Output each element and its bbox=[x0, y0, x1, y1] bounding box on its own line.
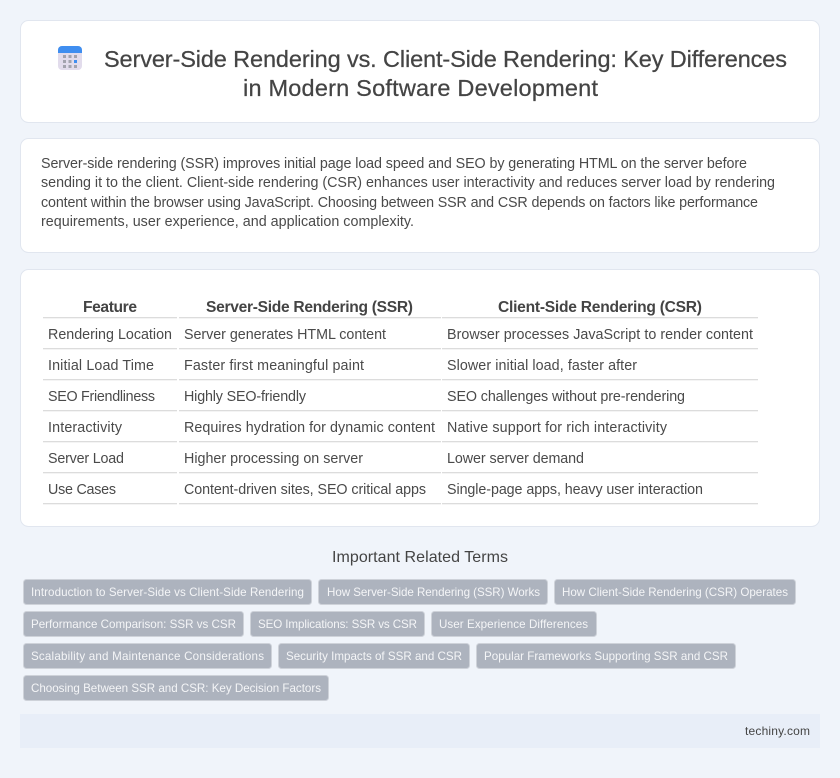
table row: server load bbox=[48, 451, 584, 467]
table row: initial load time bbox=[48, 358, 637, 374]
title bbox=[104, 46, 787, 101]
table row: rendering location: Browser processes JavaScript to render content bbox=[447, 327, 753, 343]
table row: SEO friendliness bbox=[48, 389, 685, 405]
tag: choosing bbox=[24, 676, 328, 700]
tag list: related terms bbox=[24, 580, 796, 700]
table row: server load: Server Load bbox=[48, 451, 124, 467]
tag: how SSR works bbox=[318, 580, 548, 604]
tag: introduction bbox=[24, 580, 312, 604]
footer bbox=[20, 714, 820, 748]
text block: summary: sending it to the client. Client-side rendering (CSR) enhances user interactivity and reduces server load by rendering bbox=[41, 175, 775, 191]
tag: how CSR operates bbox=[554, 580, 796, 604]
table header bbox=[83, 299, 702, 316]
title: Server-Side Rendering vs. Client-Side Rendering: Key Differences bbox=[104, 46, 787, 72]
tag: how SSR works: How Server-Side Rendering (SSR) Works bbox=[327, 586, 540, 599]
table row: interactivity: Requires hydration for dynamic content bbox=[184, 420, 435, 436]
tag: user experience bbox=[432, 612, 596, 636]
panel: summary text bbox=[20, 138, 820, 252]
footer: techiny.com bbox=[745, 724, 810, 738]
table row: SEO friendliness: SEO Friendliness bbox=[48, 389, 155, 405]
table row: interactivity: Native support for rich interactivity bbox=[447, 420, 668, 436]
text block: summary: requirements, user experience, and application complexity. bbox=[41, 214, 414, 230]
tag: performance comparison bbox=[24, 612, 244, 636]
tag: security: Security Impacts of SSR and CSR bbox=[286, 650, 462, 663]
table row: rendering location: Rendering Location bbox=[48, 327, 172, 343]
title: in Modern Software Development bbox=[243, 75, 598, 101]
table row: initial load time: Slower initial load, faster after bbox=[447, 358, 637, 374]
table row: use cases: Content-driven sites, SEO critical apps bbox=[184, 482, 426, 498]
tag: user experience: User Experience Differences bbox=[439, 618, 588, 631]
panel: comparison table bbox=[20, 270, 820, 526]
tag: scalability bbox=[24, 644, 272, 668]
table header: Server-Side Rendering (SSR) bbox=[206, 299, 413, 316]
table rules bbox=[43, 317, 758, 504]
panel: header bbox=[20, 20, 820, 122]
icon: calendar grid bbox=[58, 46, 82, 70]
tag: performance comparison: Performance Comparison: SSR vs CSR bbox=[31, 618, 236, 631]
table row: interactivity: Interactivity bbox=[48, 420, 123, 436]
text block: summary bbox=[41, 156, 775, 230]
table row: rendering location bbox=[48, 327, 753, 343]
table row: use cases: Use Cases bbox=[48, 482, 116, 498]
tag: frameworks bbox=[476, 644, 736, 668]
tag: how CSR operates: How Client-Side Rendering (CSR) Operates bbox=[562, 586, 788, 599]
tag: security bbox=[278, 644, 470, 668]
table row: server load: Lower server demand bbox=[447, 451, 584, 467]
tag: SEO implications bbox=[250, 612, 424, 636]
table row: SEO friendliness: Highly SEO-friendly bbox=[184, 389, 307, 405]
tag: frameworks: Popular Frameworks Supporting SSR and CSR bbox=[484, 650, 728, 663]
table row: use cases bbox=[48, 482, 703, 498]
tag: SEO implications: SEO Implications: SSR vs CSR bbox=[258, 618, 417, 631]
table row: rendering location: Server generates HTML content bbox=[184, 327, 386, 343]
table row: SEO friendliness: SEO challenges without pre-rendering bbox=[447, 389, 685, 405]
tag: scalability: Scalability and Maintenance Considerations bbox=[31, 650, 264, 663]
tag: choosing: Choosing Between SSR and CSR: Key Decision Factors bbox=[31, 682, 321, 695]
table header: Feature bbox=[83, 299, 137, 316]
table row: initial load time: Faster first meaningful paint bbox=[184, 358, 364, 374]
heading: related terms: Important Related Terms bbox=[332, 549, 508, 566]
text block: summary: Server-side rendering (SSR) improves initial page load speed and SEO by generating HTML on the server before bbox=[41, 156, 747, 172]
table row: initial load time: Initial Load Time bbox=[48, 358, 154, 374]
table row: use cases: Single-page apps, heavy user interaction bbox=[447, 482, 703, 498]
tag: introduction: Introduction to Server-Side vs Client-Side Rendering bbox=[31, 586, 304, 599]
table row: interactivity bbox=[48, 420, 668, 436]
table row: server load: Higher processing on server bbox=[184, 451, 363, 467]
text block: summary: content within the browser using JavaScript. Choosing between SSR and CSR depends on factors like performance bbox=[41, 195, 758, 211]
table header: Client-Side Rendering (CSR) bbox=[498, 299, 702, 316]
